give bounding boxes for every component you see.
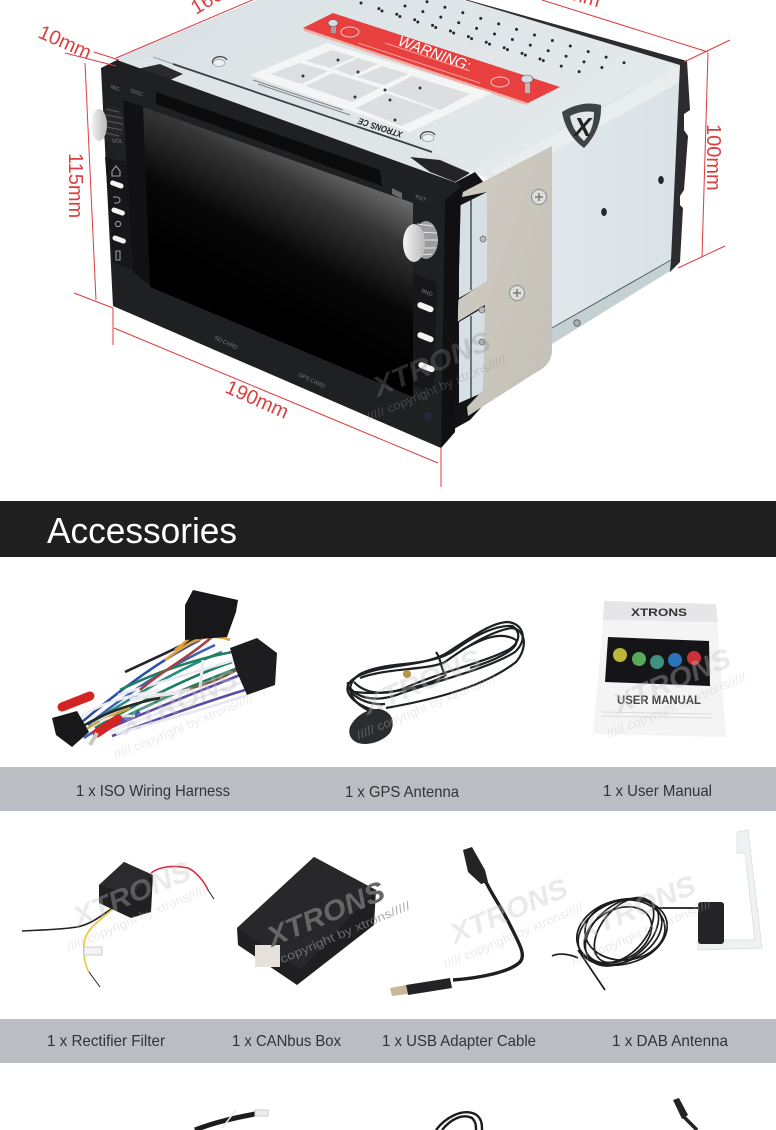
heading band: accessories [0,501,776,557]
usb plug [406,978,452,995]
side holes [658,176,664,184]
dimension label: 190mm: 190mm [222,376,292,424]
accessory: usb adapter cable [390,847,522,996]
watermark: dab [557,866,714,968]
watermark: rectifier: XTRONS [66,855,196,933]
red rca plugs [62,696,90,707]
manual fine print [602,712,712,718]
watermark: usb [429,869,586,971]
watermark: dab: ///// copyright by xtrons///// [570,897,714,968]
bezel labels: RST [414,194,427,204]
label brand: XTRONS CE [356,116,404,140]
caption bar: row two: 1 x DAB Antenna [612,1033,728,1050]
lower rail [459,306,486,403]
power indicator [424,412,432,422]
usb socket [463,847,488,884]
watermark: rectifier: ///// copyright by xtrons///// [65,883,209,954]
lower connector [52,711,89,747]
caption bar: row one: 1 x User Manual [603,783,712,800]
watermark: gps: ///// copyright by xtrons///// [355,671,499,742]
product photo: head unit [91,0,690,448]
manual screen [605,637,710,686]
cable coil [552,884,700,990]
watermark: usb: ///// copyright by xtrons///// [442,900,586,971]
accessory: dab antenna [552,830,762,990]
wire bundle [72,615,247,738]
bezel labels: BND [420,288,433,298]
manual title: USER MANUAL [617,695,701,707]
plate rings [212,57,227,64]
bezel labels: SD CARD [213,335,238,351]
box watermark [260,868,413,968]
top plate shadow edge [173,64,432,152]
accessory row three: cable loom [195,1110,268,1130]
eject button [392,188,402,199]
watermark: gps [342,640,499,742]
side clips [137,64,183,80]
device watermark: XTRONS [366,325,496,403]
bezel labels: MIC [109,84,121,93]
watermark: harness: ///// copyright by xtrons///// [112,691,256,762]
accessory row three: connector cable [673,1098,697,1130]
box watermark: XTRONS [260,875,390,953]
xtrons badge [562,104,601,148]
rail screws [479,236,486,345]
ventilation holes [361,2,625,75]
watermark: manual: XTRONS [606,642,736,720]
top connector [185,590,238,640]
dimension lines [65,0,730,487]
xtrons badge: X [572,112,593,142]
manual screen icons [613,648,701,669]
front strip under top plate [117,57,470,186]
antenna module [698,902,724,944]
right knob [403,221,438,262]
box watermark: copyright by xtrons///// [278,898,413,966]
bezel labels: VOL [112,139,123,145]
fold band [490,65,680,182]
device watermark: ///// copyright by xtrons///// [365,353,509,424]
label rule lines [253,80,350,115]
manual brand: XTRONS [631,607,687,619]
wires [151,866,208,890]
caption bar: row one: 1 x ISO Wiring Harness [76,783,230,800]
left dark column [123,100,152,287]
dimension label: 115mm: 115mm [64,153,86,218]
heading band: accessories: Accessories [47,510,237,551]
watermark: harness: XTRONS [113,663,243,741]
device watermark [352,322,509,424]
screen [143,107,413,397]
left knob [91,106,124,142]
connector [255,945,280,967]
warning fine print [358,43,480,83]
rear black edge [465,0,690,272]
watermark: harness [99,660,256,762]
dimension label: 100mm: 100mm [702,124,724,191]
gold connector [403,670,411,678]
caption bar: row two: 1 x USB Adapter Cable [382,1033,536,1050]
watermark: dab: XTRONS [571,869,701,947]
accessory: gps antenna [347,622,524,744]
antenna puck [349,709,393,744]
watermark: gps: XTRONS [356,643,486,721]
left button icons [112,166,121,260]
right connector [230,638,277,695]
accessory: iso wiring harness [52,590,277,747]
accessory: user manual [593,601,726,737]
caption bar: row two [0,1019,776,1063]
warning text: WARNING: [396,33,473,75]
accessory: rectifier filter [22,862,214,987]
upper rail [459,192,487,298]
side cover [472,65,680,328]
caption bar: row one [0,767,776,811]
antenna film [698,830,762,950]
wire tag [84,947,102,955]
dimension label: 10mm: 10mm [35,21,95,64]
front bezel [101,60,461,448]
caption bar: row one: 1 x GPS Antenna [345,784,459,801]
sticker logos [341,27,359,37]
watermark: usb: XTRONS [443,872,573,950]
right button strip [413,273,437,395]
right pill buttons [416,301,435,373]
bezel labels: DISC [129,88,144,98]
dark gap behind rails [452,172,490,430]
white specification label [250,43,492,140]
filter box [99,862,153,918]
warning sticker [303,13,560,105]
coiled cable [347,622,524,712]
bezel labels: GPS CARD [297,372,326,390]
metal bracket [457,146,552,416]
disc slot [156,92,382,186]
left button strip [105,157,133,270]
sticker screws [328,20,338,33]
caption bar: row two: 1 x CANbus Box [232,1033,341,1050]
bracket screws [532,190,546,204]
watermark: manual [592,639,749,741]
top cover [116,0,680,172]
lower flange [552,260,671,344]
accessory row three: coiled cable [436,1112,482,1130]
watermark: rectifier [52,852,209,954]
caption bar: row two: 1 x Rectifier Filter [47,1033,166,1050]
accessory: canbus box [237,857,413,985]
bezel labels [109,84,433,390]
left pill buttons [109,180,127,244]
watermark: manual: ///// copyright by xtrons///// [605,670,749,741]
